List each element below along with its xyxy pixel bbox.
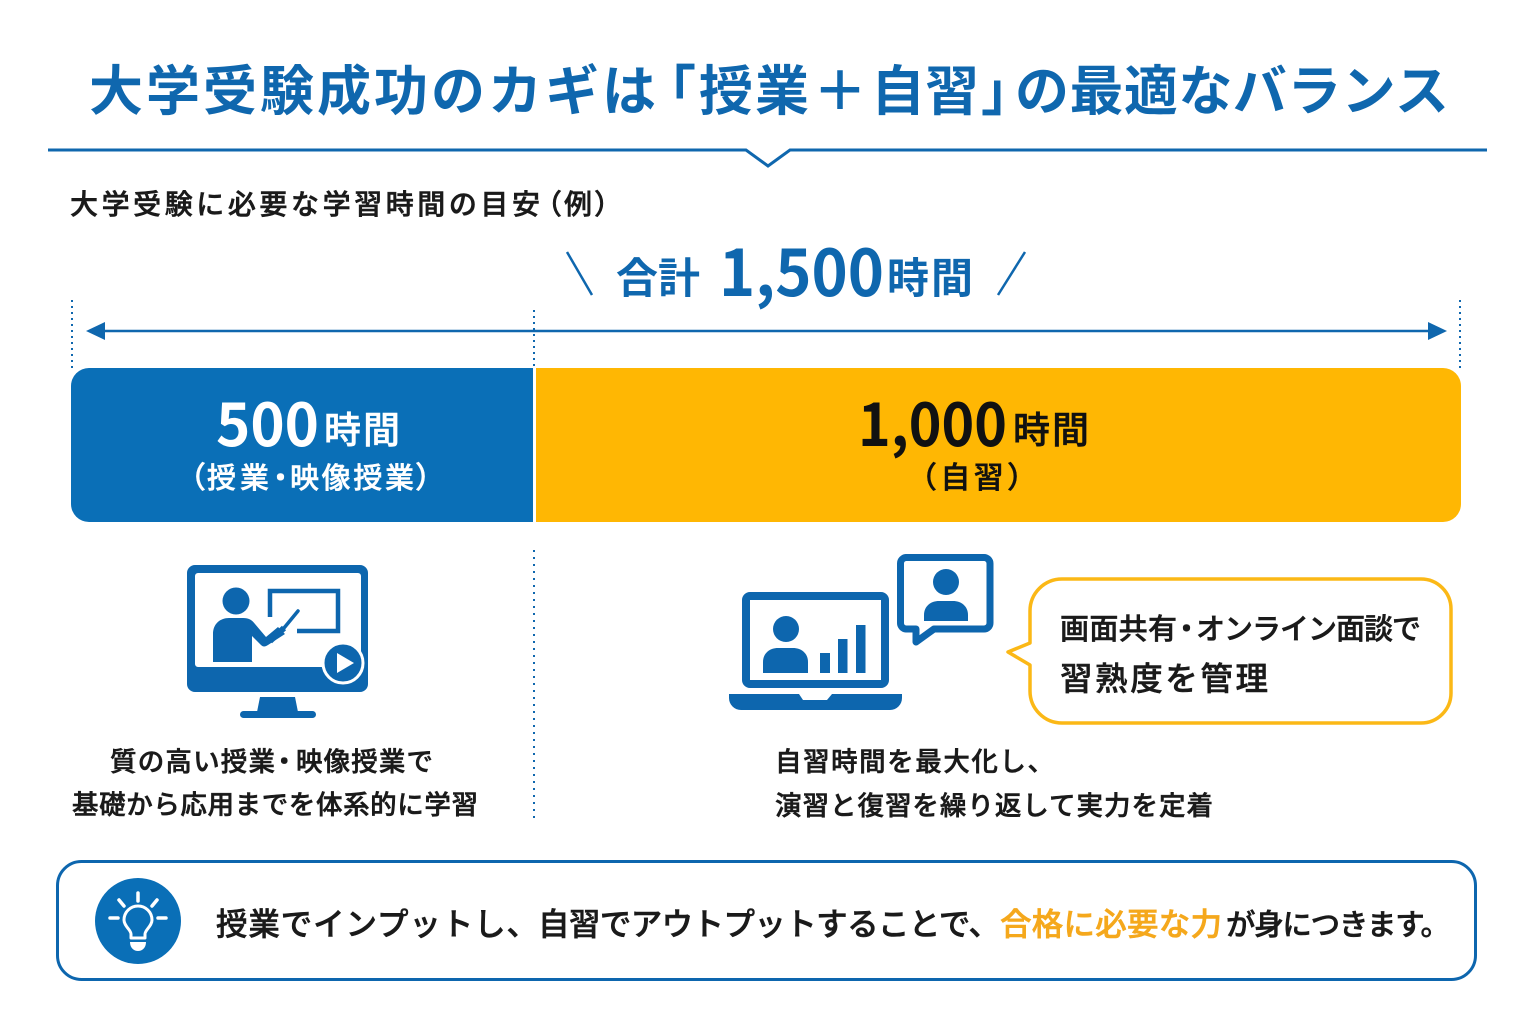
callout <box>1008 579 1451 723</box>
callout: 画面共有 <box>1060 606 1177 648</box>
bar segment: self-study 1000 hours <box>536 368 1461 522</box>
icon: monitor with lecturer <box>187 565 368 718</box>
caption: lectures: ・ <box>271 740 298 779</box>
subheading: （例） <box>534 183 622 223</box>
icon: chat bubble with person <box>900 558 990 642</box>
bar segment: lectures 500 hours: ） <box>415 453 445 497</box>
bar segment: self-study 1000 hours: （自習） <box>907 453 1037 497</box>
title: 」 <box>981 47 1035 126</box>
column divider <box>533 550 535 822</box>
panel: summary message <box>58 862 1476 980</box>
title <box>89 47 1449 126</box>
panel: summary message: 授業でインプットし、 <box>216 899 538 945</box>
panel: summary message: 自習でアウトプットすることで、 <box>538 899 1000 945</box>
panel: summary message: が身につきます。 <box>1226 902 1450 944</box>
callout: 習熟度を管理 <box>1060 653 1268 700</box>
total hours heading: 時間 <box>887 245 973 306</box>
callout: ・ <box>1172 606 1201 648</box>
title: ＋ <box>813 47 867 126</box>
caption: lectures: 質の高い授業 <box>110 740 275 779</box>
bar segment: self-study 1000 hours: 1,000 <box>858 378 1007 463</box>
caption: self-study <box>775 740 1213 823</box>
bar segment: self-study 1000 hours: 時間 <box>1013 400 1089 454</box>
bar segment: lectures 500 hours: 授業 <box>207 455 269 497</box>
title: の最適なバランス <box>1015 47 1449 126</box>
title: 自習 <box>871 47 979 126</box>
icon: light bulb <box>95 878 181 964</box>
span arrow with dotted guides <box>72 300 1460 370</box>
panel: summary message: 合格に必要な力 <box>1000 899 1222 945</box>
total hours heading: 1,500 <box>719 223 884 315</box>
icon: laptop with person and chart <box>729 558 990 710</box>
total hours heading <box>567 223 1025 315</box>
title divider with notch <box>48 150 1487 166</box>
total hours heading: 合計 <box>616 245 700 306</box>
bar segment: lectures 500 hours: 時間 <box>324 400 400 454</box>
caption: self-study: 演習と復習を繰り返して実力を定着 <box>775 784 1213 823</box>
bar segment: lectures 500 hours: 映像授業 <box>290 455 414 497</box>
title: 「 <box>642 47 696 126</box>
title: 授業 <box>699 47 809 126</box>
caption: lectures: 基礎から応用までを体系的に学習 <box>72 783 478 822</box>
caption: lectures <box>72 740 478 822</box>
callout: オンライン面談で <box>1196 606 1421 648</box>
bar segment: lectures 500 hours: （ <box>176 453 206 497</box>
caption: lectures: 映像授業で <box>296 740 433 779</box>
caption: self-study: 自習時間を最大化し、 <box>775 740 1054 779</box>
bar segment: lectures 500 hours <box>71 368 533 522</box>
title: 大学受験成功のカギは <box>89 47 656 126</box>
subheading: 大学受験に必要な学習時間の目安 <box>70 183 540 223</box>
bar segment: lectures 500 hours: 500 <box>216 378 319 463</box>
bar segment: lectures 500 hours: ・ <box>266 455 295 497</box>
